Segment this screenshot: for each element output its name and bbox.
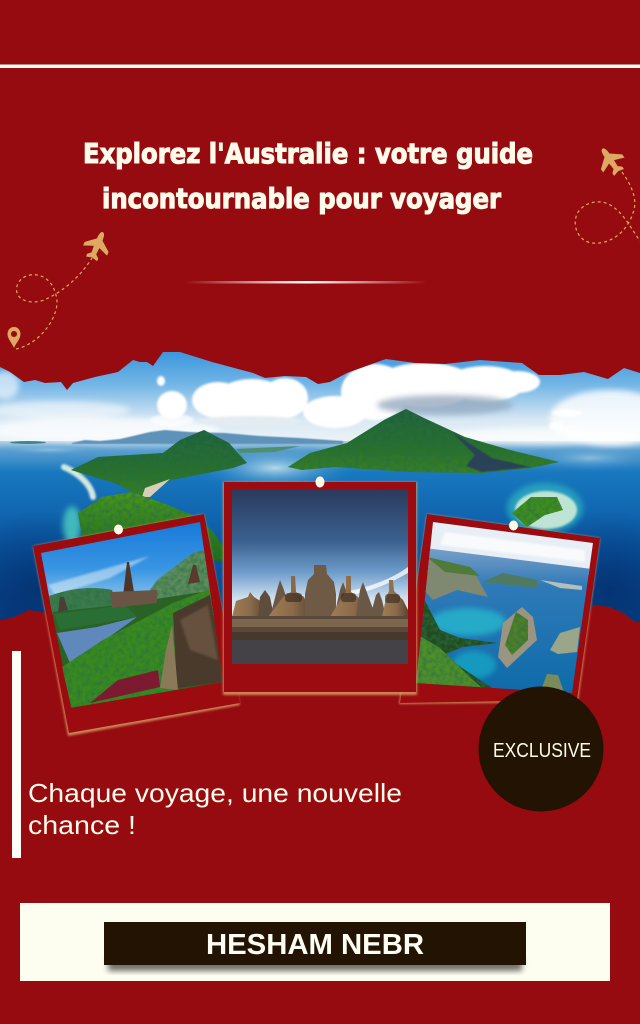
tagline: Chaque voyage, une nouvelle <box>28 778 402 808</box>
distant mountains <box>72 430 343 444</box>
tagline <box>28 778 402 840</box>
center polaroid frame <box>223 482 417 695</box>
title divider <box>185 281 427 284</box>
tagline: chance ! <box>28 810 136 840</box>
author name bar: HESHAM NEBR <box>206 929 424 961</box>
left photo pin <box>114 524 123 534</box>
exclusive badge <box>478 686 604 812</box>
exclusive badge: EXCLUSIVE <box>493 739 591 762</box>
icon: left flight route <box>8 227 115 349</box>
torn paper lower red area <box>0 605 640 760</box>
sand spit <box>64 467 93 497</box>
center photo: stupa temple <box>232 489 408 664</box>
title: incontournable pour voyager <box>102 182 502 215</box>
vertical white bar <box>12 651 21 858</box>
title <box>83 137 533 215</box>
left polaroid frame <box>30 514 240 736</box>
right photo: sea cliffs <box>416 522 593 693</box>
small reef island <box>507 483 583 533</box>
author panel <box>20 903 610 981</box>
title: Explorez l'Australie : votre guide <box>83 137 533 170</box>
icon: airplane <box>80 227 115 264</box>
left photo: temple by a lake <box>41 522 223 708</box>
right polaroid frame <box>399 514 600 704</box>
author bar shadow <box>108 958 522 971</box>
volcano island <box>288 409 559 473</box>
icon: airplane <box>592 141 630 180</box>
lower green island <box>63 506 81 544</box>
icon: right flight route <box>575 141 640 243</box>
left hill island <box>71 430 247 497</box>
top white line <box>0 64 640 68</box>
center photo pin <box>316 476 324 488</box>
torn paper top edge <box>0 340 640 390</box>
right photo pin <box>509 520 518 530</box>
landscape photo: island panorama <box>0 352 640 622</box>
author name bar <box>104 922 526 965</box>
icon: location pin <box>8 327 20 348</box>
